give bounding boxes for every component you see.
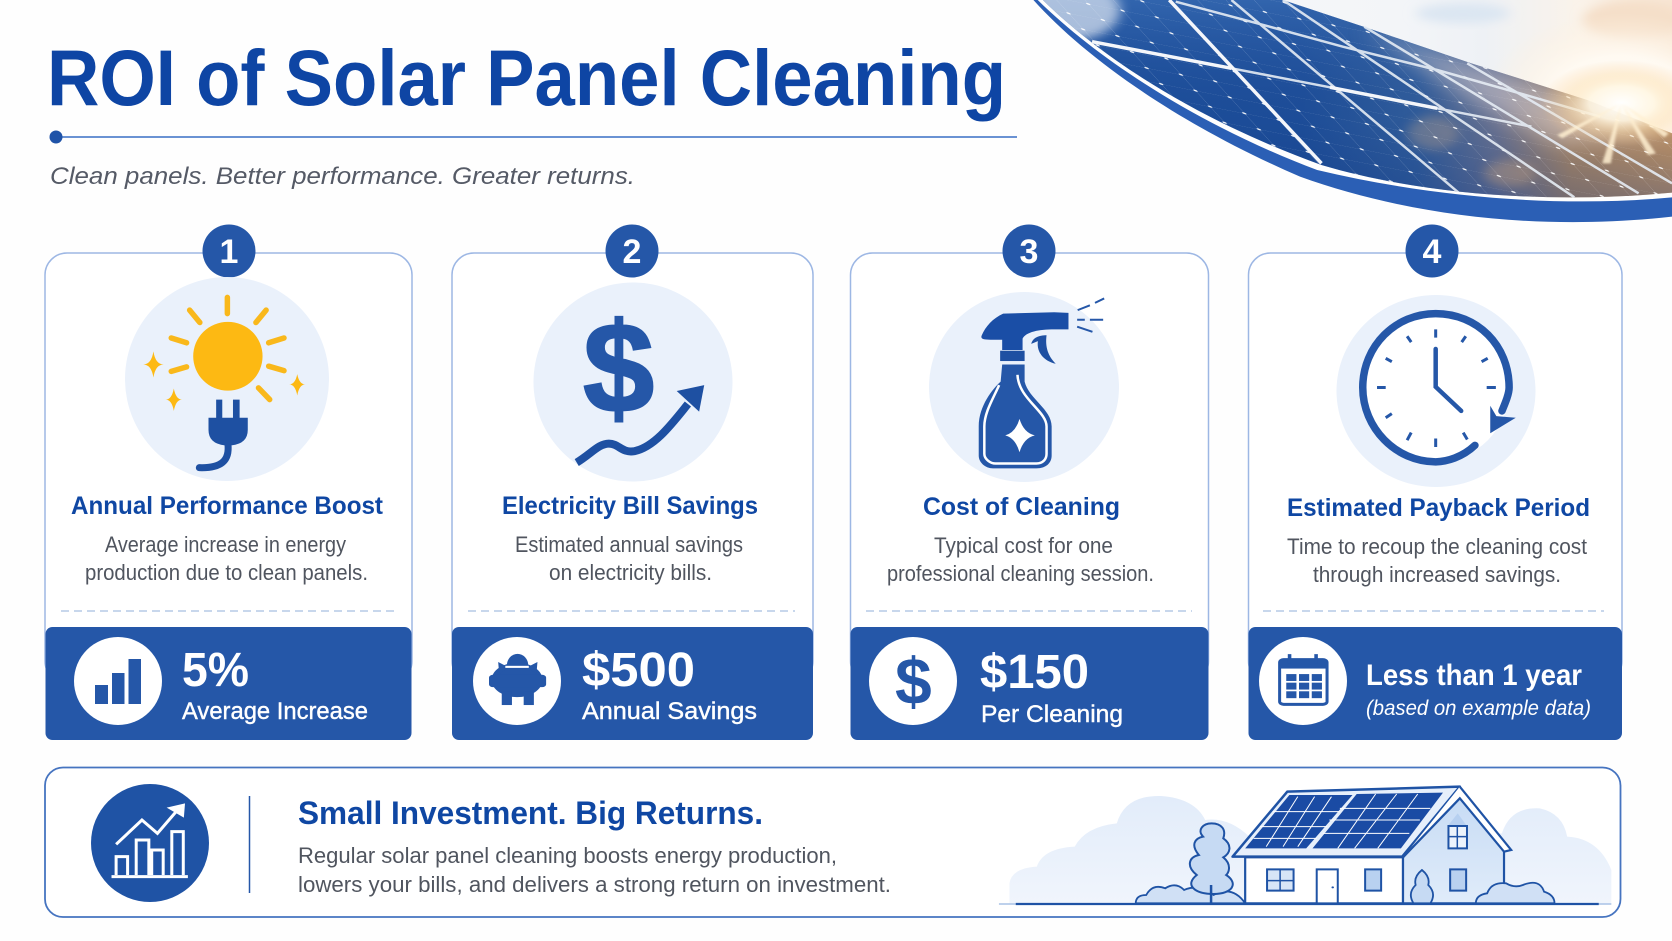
- card outline: [1248, 253, 1622, 683]
- icon: dollar sign: $: [895, 644, 932, 718]
- panel: annual performance boost: [45, 224, 412, 740]
- icon: growth chart circle: [91, 784, 209, 902]
- header solar panel photo: [1034, 0, 1672, 222]
- heading: Electricity Bill Savings: [502, 492, 758, 520]
- description: through increased savings.: [1313, 562, 1561, 587]
- description: Estimated annual savings: [515, 532, 743, 557]
- heading: Estimated Payback Period: [1287, 494, 1590, 522]
- number badge 4: [1406, 224, 1458, 278]
- number badge 4: 4: [1423, 233, 1442, 271]
- banner body text: Regular solar panel cleaning boosts energy production,: [298, 843, 837, 868]
- stat bar: Less than 1 year: [1366, 659, 1582, 692]
- banner outline: [45, 768, 1620, 917]
- stat bar: [46, 627, 412, 740]
- banner heading: Small Investment. Big Returns.: [298, 795, 763, 831]
- card outline: [45, 253, 412, 683]
- number badge 1: [202, 224, 256, 278]
- description: [887, 533, 1154, 586]
- stat bar: [1248, 627, 1622, 740]
- icon circle: [534, 282, 732, 482]
- description: [1287, 534, 1587, 587]
- icon: rising arrow: [577, 385, 704, 463]
- number badge 3: [1002, 224, 1056, 278]
- icon: piggy bank: [489, 654, 546, 705]
- banner body text: [298, 843, 891, 897]
- stat bar: Annual Savings: [582, 698, 757, 725]
- heading: Annual Performance Boost: [71, 492, 384, 520]
- number badge 2: 2: [623, 233, 641, 271]
- description: Average increase in energy: [105, 532, 346, 557]
- panel: electricity bill savings: [452, 224, 813, 740]
- description: [85, 532, 368, 585]
- description: on electricity bills.: [549, 560, 712, 585]
- description: Typical cost for one: [934, 533, 1113, 558]
- panel: cost of cleaning: [850, 224, 1208, 740]
- stat bar: $500: [582, 644, 695, 697]
- blue swoosh band: [1033, 0, 1672, 222]
- number badge 1: 1: [220, 233, 238, 271]
- card outline: [452, 253, 813, 683]
- number badge 3: 3: [1020, 233, 1038, 271]
- icon circle: [125, 277, 329, 481]
- description: Time to recoup the cleaning cost: [1287, 534, 1587, 559]
- stat bar: $150: [980, 646, 1089, 699]
- title rule with dot: [50, 130, 1017, 144]
- stat bar: 5%: [182, 644, 249, 697]
- icon circle: [929, 292, 1119, 482]
- photo: sky and panels: [1043, 0, 1672, 198]
- icon: bar chart: [95, 659, 141, 704]
- heading: Cost of Cleaning: [923, 493, 1120, 521]
- icon: dollar sign: $: [583, 297, 654, 440]
- icon: spray bottle: [979, 298, 1104, 468]
- icon circle: [1336, 295, 1536, 487]
- number badge 2: [606, 224, 658, 278]
- stat bar: Average Increase: [182, 698, 368, 725]
- panel: small investment big returns: [45, 768, 1620, 917]
- banner body text: lowers your bills, and delivers a strong return on investment.: [298, 872, 891, 897]
- icon: calendar: [1280, 654, 1327, 704]
- stat bar: [452, 627, 813, 740]
- description: production due to clean panels.: [85, 560, 368, 585]
- stat bar: Per Cleaning: [981, 701, 1123, 728]
- stat bar: [850, 627, 1208, 740]
- panel: estimated payback period: [1248, 224, 1622, 740]
- icon: clock with arrow: [1362, 313, 1516, 462]
- title: ROI of Solar Panel Cleaning: [47, 33, 1006, 122]
- illustration: house with solar roof: [999, 787, 1611, 904]
- description: professional cleaning session.: [887, 561, 1154, 586]
- icon: sun with plug: [143, 297, 305, 468]
- stat bar: (based on example data): [1366, 697, 1591, 720]
- card outline: [850, 253, 1208, 683]
- subtitle: Clean panels. Better performance. Greater returns.: [50, 163, 635, 190]
- description: [515, 532, 743, 585]
